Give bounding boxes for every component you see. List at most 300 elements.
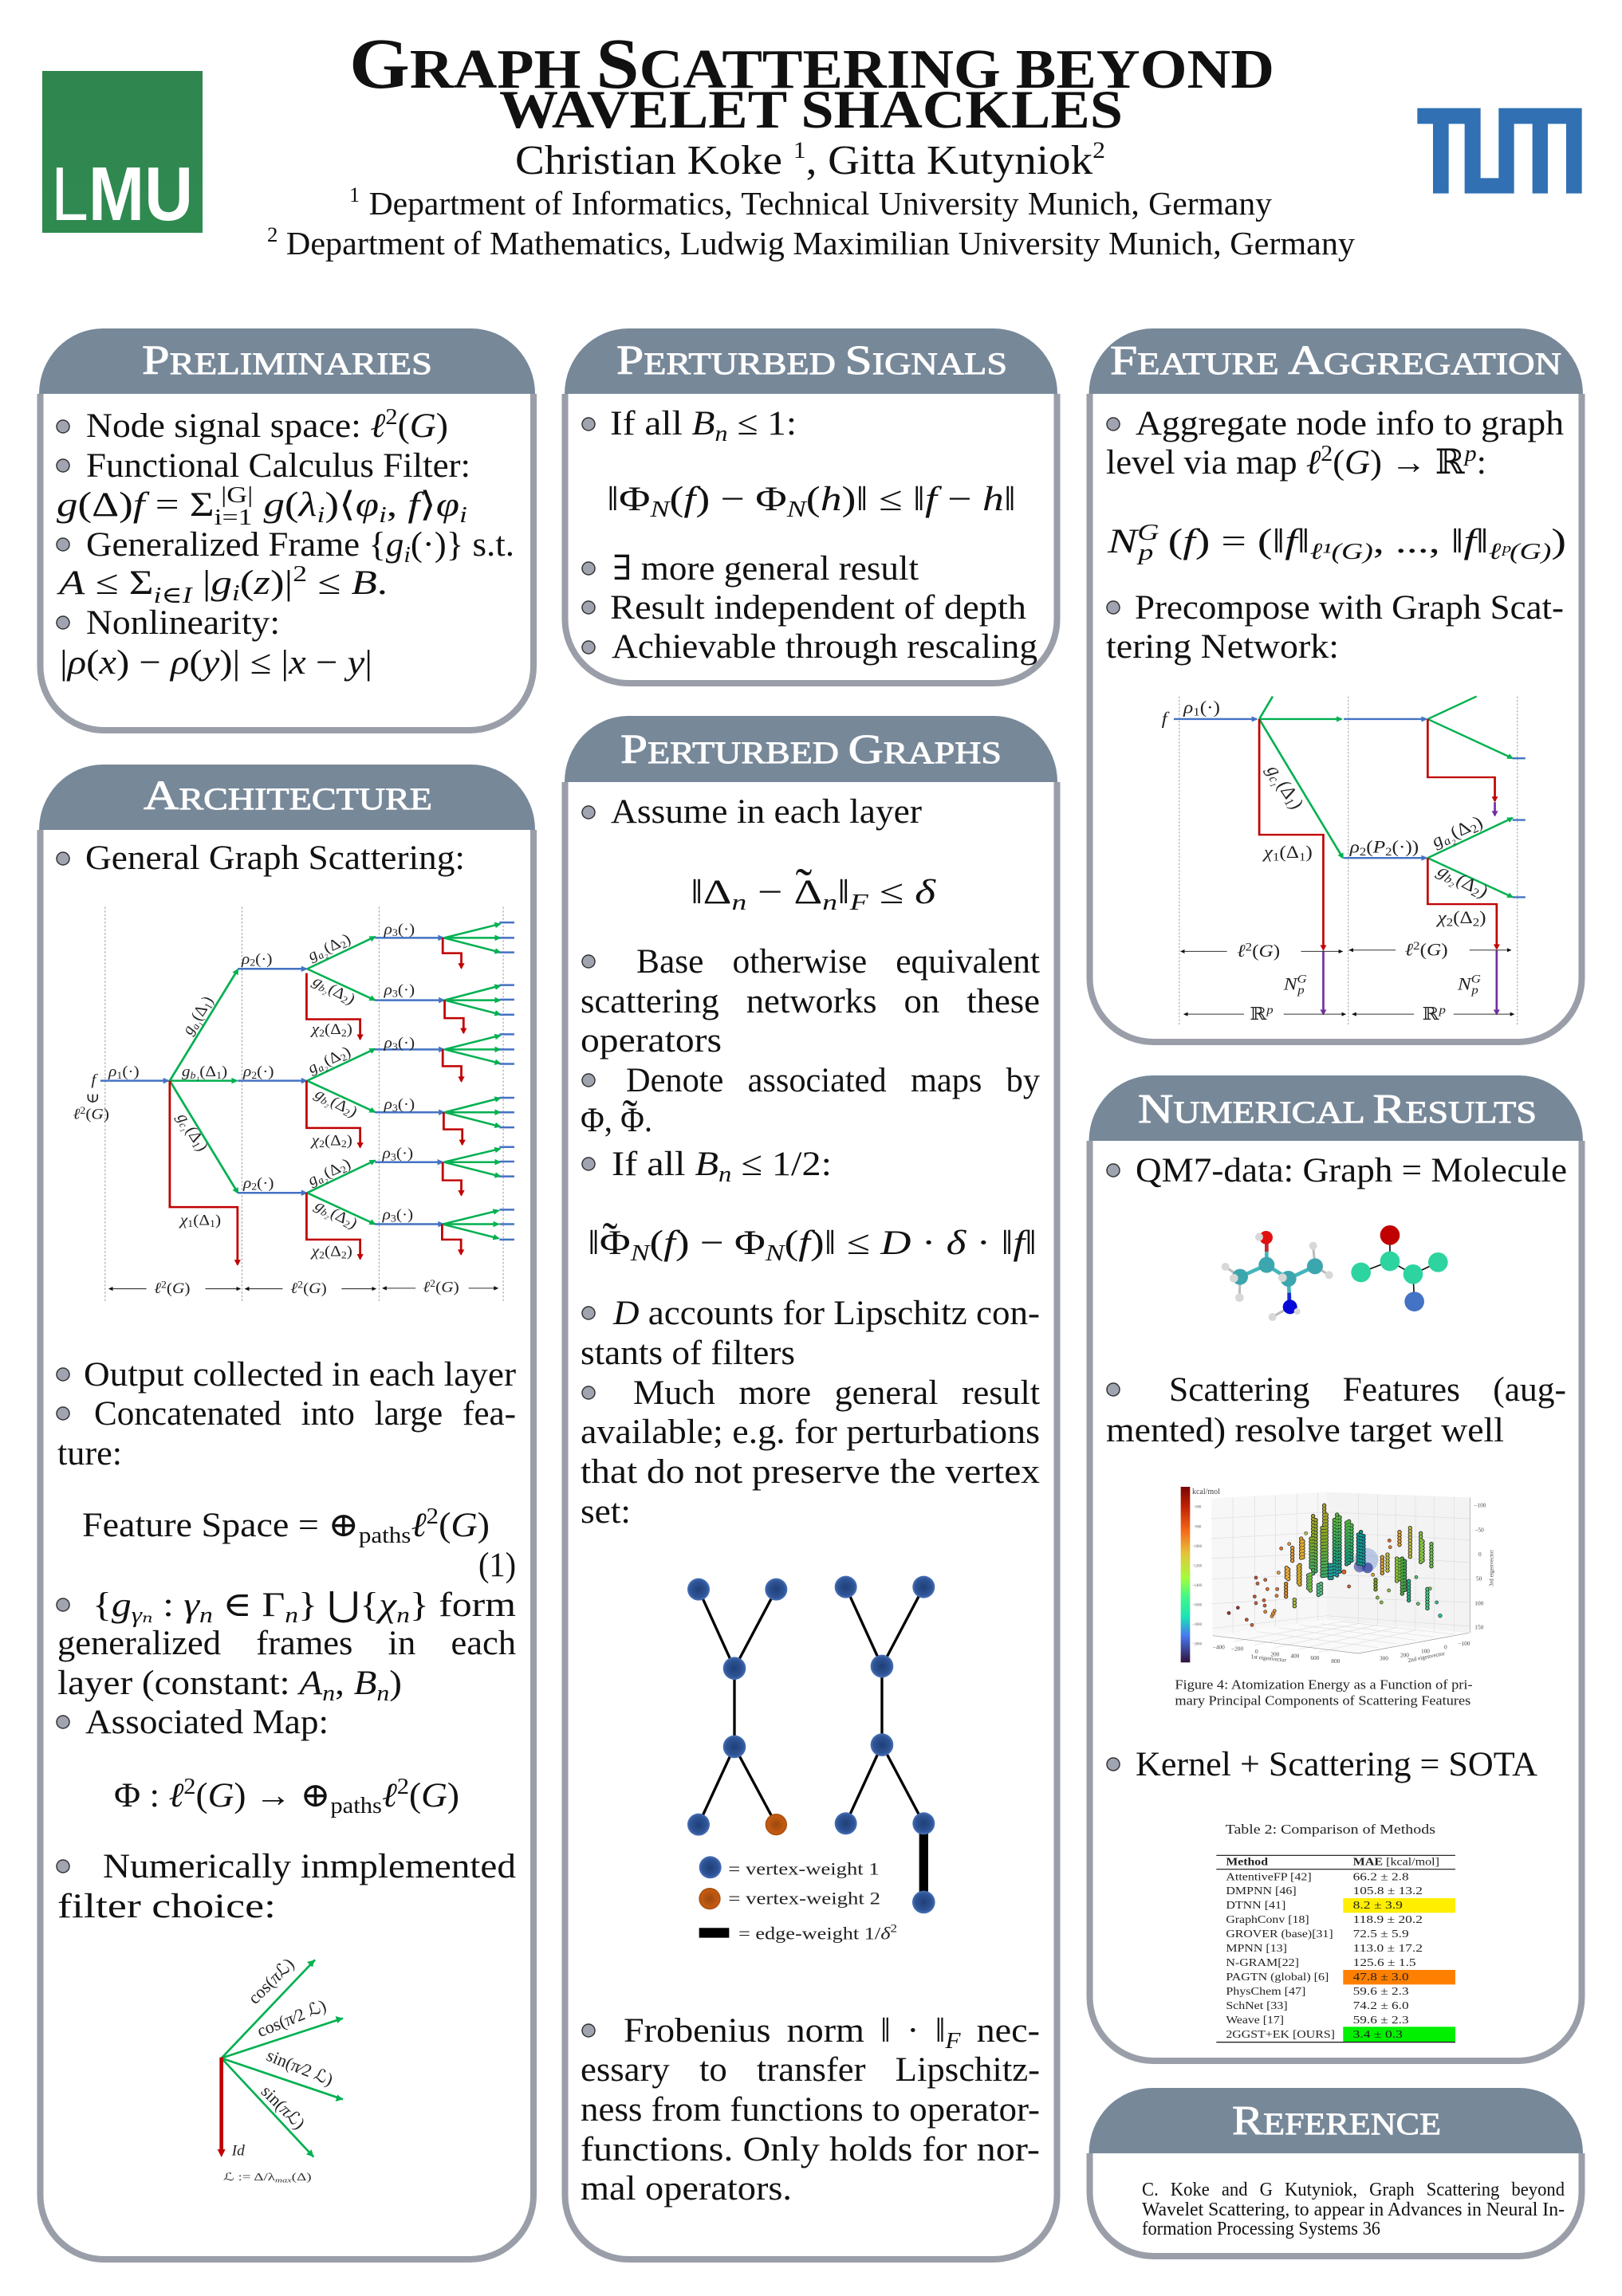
chart: two-layer aggregation network: ( [1366,838,1373,857]
bullet: precompose: tering Network: [1106,628,1339,666]
bullet: much more general: Much more general result [633,1374,1040,1412]
chart: scattering tree diagram: ρ [242,1063,251,1080]
bullet: result independent of depth: Result independent of depth [610,589,1026,627]
chart: filter choice fan: ℒ := Δ/λ [223,2171,259,2183]
chart: scattering tree diagram: ) [347,1132,352,1149]
data points [1227,1505,1442,1626]
chart: scattering tree diagram: χ [179,1212,188,1229]
formula: graph stability: f)‖ ≤ D · δ · ‖ f‖ [798,1225,1034,1262]
formula: operator perturbation: − Δ [746,874,822,911]
formula: graph stability: N [765,1240,786,1266]
chart: scattering tree diagram: 3 [392,1041,398,1052]
formula: graph stability: f) − Φ [663,1225,748,1262]
chart: scattering tree diagram: (Δ [321,1160,344,1181]
bullet: aggregate node info: G) → ℝ [1344,444,1462,482]
chart: two-layer aggregation network: p [1297,985,1305,997]
bullet: generalized frames: n [322,1681,335,1706]
chart: scattering tree diagram: (·) [122,1063,140,1080]
formula: graph stability: ( [650,1225,663,1262]
chart: scattering tree diagram: (Δ [327,1205,351,1227]
bullet: aggregate node info: ( [1333,444,1344,482]
chart: scattering tree diagram: ρ [384,981,392,998]
chart: scattering tree diagram: (·) [257,1063,274,1080]
3d axes: 0 [1444,1644,1447,1651]
chart: scattering tree diagram: g [312,1086,329,1103]
bullet: assume in each layer: Assume in each layer [611,793,922,831]
bullet: generalized frame: (·)} s.t. [411,526,514,564]
formula: operator perturbation: ≤ [868,874,915,911]
bullet: concatenated [57,1395,516,1472]
panel: reference [1089,2088,1583,2256]
chart: two-layer aggregation network: (·) [1200,698,1220,718]
chart: filter choice fan: cos(πℒ) [244,1954,298,2008]
table: comparison of methods: MPNN [13] [1226,1942,1287,1954]
bullet: node signal space: ( [398,407,410,445]
bullet: generalized frames: : [153,1586,183,1624]
bullet: scattering features: mented) resolve target well [1106,1412,1504,1449]
chart: two-layer aggregation network: 2 [1385,846,1392,859]
chart: two-layer aggregation network: 1 [1281,796,1297,808]
chart: graph perturbation example [687,1576,935,1943]
table: comparison of methods: MAE [kcal/mol] [1353,1855,1439,1867]
chart: scattering tree diagram: a₁ [188,1018,204,1032]
chart: scattering tree diagram: ρ [382,1146,391,1162]
chart: scattering tree diagram: (Δ [325,1132,341,1149]
bullet: node signal space: G) [410,407,447,445]
chart: two-layer aggregation network: ) [1479,909,1486,928]
chart: two-layer aggregation network: ℝ [1250,1005,1266,1024]
chart: scattering tree diagram: (Δ [325,981,348,1003]
bullet: frobenius norm: F [944,2028,961,2054]
chart: scattering tree diagram: b₂ [319,1206,333,1221]
formula: associated map: ℓ [382,1777,397,1814]
panel: perturbed graphs [565,716,1057,2259]
chart: filter choice fan: sin(π⁄2 ℒ) [264,2045,336,2090]
bullet: generalized frames: ) [389,1665,402,1702]
bullet: if all Bn: If all B [610,405,713,442]
formula: feature space: ( [439,1507,451,1544]
bullet: aggregate node info: Aggregate node info to graph [1136,405,1564,442]
chart: scattering tree diagram: ρ [384,921,392,938]
chart: scattering tree diagram: ρ [241,951,250,968]
chart: scattering tree diagram: b₂ [319,1095,333,1109]
chart: two-layer aggregation network: 2 [1447,916,1453,929]
3d axes: 3rd eigenvector [1488,1550,1495,1586]
formula: norm aggregation: p [1136,540,1153,565]
formula: signal stability: h)‖ ≤ ‖ f − h‖ [821,481,1014,518]
formula: graph stability [588,1214,1037,1266]
bullet: functional calculus filter [57,447,470,530]
chart: scattering tree diagram: G) [441,1279,459,1295]
bullet: nonlinearity: Nonlinearity: [86,604,280,642]
bullet: functional calculus filter: φ [356,486,379,524]
chart: two-layer aggregation network: (Δ [1279,843,1299,863]
chart: scattering tree diagram: 3 [392,1102,398,1114]
bullet: generalized frames: n [285,1602,298,1628]
table: comparison of methods: Method [1226,1855,1269,1867]
chart: two-layer aggregation network: ℓ [1405,941,1413,960]
chart: scattering tree diagram: 2 [161,1279,167,1290]
chart: scattering tree diagram: 2 [341,1107,352,1119]
authors: 1 [793,137,806,163]
bullet: if all Bn: ≤ 1: [727,405,797,442]
chart: scattering tree diagram: 1 [216,1069,222,1081]
3d axes: 0 [1255,1648,1258,1655]
bullet: frobenius norm: nec- [961,2012,1040,2050]
formula: norm aggregation: N [1107,523,1140,560]
chart: scattering tree diagram: g [173,1111,193,1126]
chart: two-layer aggregation network: ( [1252,942,1259,961]
chart: two-layer aggregation network: P [1372,838,1385,857]
chart: scattering tree diagram: (·) [398,1035,415,1052]
chart: two-layer aggregation network: ) [1285,798,1308,812]
legend: vertex and edge weights: = vertex-weight 1 [728,1859,880,1879]
table: comparison of methods: DMPNN [46] [1226,1885,1297,1897]
chart: scattering tree diagram: 2 [338,1163,349,1176]
bullet: generalized frame: i [404,542,411,568]
legend: vertex and edge weights: = edge-weight 1/ δ [738,1923,889,1943]
chart: scattering tree diagram: ) [347,1021,352,1038]
color bar: −2000 [1192,1643,1203,1647]
bullet: functional calculus filter: g(Δ) f = Σ [57,486,201,524]
bullet: output collected: Output collected in each layer [84,1356,516,1394]
3d axes: 150 [1474,1623,1484,1630]
text block: citation: C. Koke and G Kutyniok, Graph Scattering beyond [1142,2180,1565,2200]
bullet: generalized frames: n [376,1681,389,1706]
chart: two-layer aggregation network: p [1266,1004,1274,1016]
chart: two-layer aggregation network: p [1470,985,1478,997]
chart: two-layer aggregation network: G [1471,973,1481,985]
chart: scattering tree diagram: ( [167,1280,172,1297]
chart: two-layer aggregation network: g [1427,830,1447,851]
table: comparison of methods: 74.2 ± 6.0 [1353,1999,1409,2011]
chart: scattering tree diagram: b₂ [317,982,331,996]
bullet: kernel + scattering: Kernel + Scattering = SOTA [1136,1746,1537,1783]
bullet: generalized frames: } ⋃{ [298,1586,379,1624]
chart: scattering tree diagram: (·) [255,951,272,968]
logo: LMU [42,71,203,237]
3d axes: 800 [1331,1657,1341,1665]
bullet: denote maps [581,1062,1040,1141]
chart: two-layer aggregation network: 2 [1246,942,1252,953]
color bar: −1800 [1192,1623,1203,1627]
bullet: generalized frame: B. [351,564,386,602]
chart: two-layer aggregation network: a₂ [1441,832,1458,848]
bullet: denote maps: ˜ [623,1091,638,1141]
chart: scattering tree diagram: 3 [392,988,398,999]
chart: scattering tree diagram: ) [341,930,354,948]
chart: two-layer aggregation network: g [1262,762,1286,780]
chart: scattering tree diagram: ) [199,993,217,1006]
table: comparison of methods: 59.6 ± 2.3 [1353,2014,1409,2026]
formula: associated map: Φ : ℓ [114,1777,183,1814]
3d axes: 200 [1270,1650,1280,1657]
3d axes: 50 [1476,1575,1482,1582]
chart: scattering tree diagram: ) [341,1155,354,1173]
bullet: generalized frames: } form [410,1586,516,1624]
chart: scattering tree diagram: 2 [80,1105,85,1116]
chart: scattering tree diagram: (Δ [327,1094,351,1115]
heading: numerical results: NUMERICAL RESULTS [1138,1087,1537,1132]
chart: scattering tree diagram: a₂ [315,1060,329,1074]
chart: scattering tree diagram: (·) [396,1146,413,1162]
formula: feature space: G) [451,1507,489,1544]
chart: scattering tree diagram: ∈ [84,1093,102,1104]
bullet: much more general: that do not preserve the vertex [581,1453,1040,1491]
chart: scattering tree diagram: ( [303,1280,309,1297]
table: comparison of methods: 3.4 ± 0.3 [1353,2028,1403,2040]
formula: feature space: 2 [427,1504,439,1529]
chart: scattering tree diagram: 2 [341,1249,347,1260]
chart: two-layer aggregation network: b₂ [1442,872,1459,889]
legend: vertex and edge weights [699,1856,897,1943]
legend: vertex and edge weights: = vertex-weight 2 [728,1888,880,1908]
bullet: functional calculus filter: i [317,502,325,528]
bullet: D accounts: D accounts for Lipschitz con- [612,1295,1040,1332]
bullet: generalized frames: n [199,1602,213,1628]
bullet: QM7 data: QM7-data: Graph = Molecule [1136,1152,1567,1189]
formula: associated map: ( [196,1777,208,1814]
formula: feature space: (1) [478,1547,516,1584]
3d axes: −50 [1474,1527,1484,1534]
bullet: base networks: scattering networks on these [581,983,1040,1020]
table: comparison of methods: N-GRAM[22] [1226,1956,1299,1968]
bullet: generalized frames: layer (constant: A [57,1665,321,1702]
table: comparison of methods: 105.8 ± 13.2 [1353,1885,1423,1897]
chart: scattering tree diagram: a₂ [315,1172,329,1186]
formula: norm aggregation: ( [1168,523,1183,560]
panel: preliminaries [39,328,535,730]
chart: scattering tree diagram: f [91,1071,98,1088]
chart: scattering tree diagram: 2 [319,1249,325,1260]
panel: perturbed signals [565,328,1057,683]
chart: scattering tree diagram: 1 [202,1001,215,1011]
bullet: generalized frames: generalized frames in each [57,1625,516,1662]
chart: scattering tree diagram: ) [344,991,358,1008]
bullet: concatenated: ture: [57,1435,122,1472]
chart: two-layer aggregation network: ) [1470,812,1486,832]
bullet: much more general: available; e.g. for perturbations [581,1413,1040,1451]
chart: scattering tree diagram: ℓ [73,1106,81,1122]
bullet: aggregate node info: p [1463,441,1477,466]
authors: , Gitta Kutyniok [806,138,1092,183]
formula: norm aggregation: ℓ¹(G) [1309,539,1373,564]
color bar: −1200 [1192,1565,1203,1569]
chart: filter choice fan [218,1954,343,2184]
formula: associated map: G) [421,1777,459,1814]
chart: two-layer aggregation network: ℝ [1422,1005,1439,1024]
bullet: base networks [581,943,1040,1060]
formula: norm aggregation: G [1137,520,1159,545]
chart: scattering tree diagram: ( [435,1279,441,1295]
3d axes: 2nd eigenvector [1407,1649,1446,1664]
chart: two-layer aggregation network: (Δ [1272,778,1301,802]
chart: two-layer aggregation network: p [1438,1004,1446,1016]
bullet: scattering features: Scattering Features (aug- [1169,1371,1566,1409]
heading: perturbed signals [565,328,1057,394]
chart: scattering tree diagram: 1 [189,1140,203,1150]
formula: operator perturbation: ‖Δ [691,874,722,911]
formula: graph stability: ‖Φ [588,1225,623,1262]
chart: scattering tree diagram: (Δ [187,1002,211,1024]
table: comparison of methods: SchNet [33] [1226,1999,1288,2011]
bullet: generalized frame: i [232,580,240,606]
bullet: scattering features [1106,1371,1566,1449]
heading: feature aggregation: FEATURE AGGREGATION [1110,338,1561,383]
chart: scattering tree diagram: (·) [398,1096,415,1113]
color bar: −1400 [1192,1584,1203,1588]
figure: atomization energy scatter plot [1175,1487,1495,1708]
panel: feature aggregation [1089,328,1583,1042]
bullet: nonlinearity: |ρ(x) − ρ(y)| ≤ |x − y| [60,644,372,682]
bullet: concatenated: Concatenated into large fea- [94,1395,516,1433]
chart: filter choice fan: Id [231,2142,245,2159]
heading: preliminaries: PRELIMINARIES [142,338,432,383]
table: comparison of methods: 125.6 ± 1.5 [1353,1956,1416,1968]
bullet: much more general [581,1374,1040,1531]
table: comparison of methods: DTNN [41] [1226,1899,1285,1911]
color bar [1181,1487,1220,1662]
bullet: general graph scattering: General Graph Scattering: [85,839,465,877]
chart: two-layer aggregation network: ℓ [1237,942,1246,961]
formula: operator perturbation: n [731,890,746,915]
chart: two-layer aggregation network: ρ [1349,838,1360,857]
graph: right tree with heavy edge [835,1576,935,1913]
caption: figure 4: Figure 4: Atomization Energy as a Function of pri- [1175,1677,1473,1692]
chart: scattering tree diagram: ℓ [423,1279,431,1295]
bullet: functional calculus filter: , [387,486,407,524]
bullet: functional calculus filter: g(λ [263,486,313,524]
table: comparison of methods: Table 2: Comparison of Methods [1226,1822,1435,1837]
authors: Christian Koke [515,138,767,183]
chart: two-layer aggregation network: χ [1262,843,1274,863]
chart: two-layer aggregation network: 2 [1469,886,1482,900]
table: comparison of methods: PhysChem [47] [1226,1985,1305,1997]
heading: perturbed graphs: PERTURBED GRAPHS [620,727,1002,773]
chart: two-layer aggregation network: N [1283,975,1298,994]
chart: filter choice fan: max [275,2176,292,2184]
bullet: frobenius norm [581,2012,1040,2208]
chart: scattering tree diagram: 2 [250,957,255,969]
bullet: precompose [1106,589,1564,666]
chart: two-layer aggregation network: G) [1259,942,1280,961]
bullet: generalized frames: B [354,1665,376,1702]
bullet: achievable through rescaling: Achievable through rescaling [612,628,1037,666]
table: comparison of methods: 47.8 ± 3.0 [1353,1971,1409,1983]
bullet: aggregate node info: 2 [1321,441,1333,466]
chart: two-layer aggregation network: (·)) [1392,838,1419,857]
chart: scattering tree diagram [73,906,514,1301]
bullet: generalized frame: Generalized Frame { g [86,526,403,564]
3d axes: −100 [1474,1502,1486,1509]
chart: two-layer aggregation network: 2 [1473,916,1479,929]
panel: architecture [39,765,535,2259]
chart: scattering tree diagram: G) [309,1280,327,1297]
chart: scattering tree diagram: ) [215,1212,221,1229]
bullet: generalized frame: g [211,564,232,602]
chart: scattering tree diagram: (Δ [325,1021,341,1038]
3d axes: 1st eigenvector [1250,1653,1287,1664]
chart: two-layer aggregation network: (Δ [1453,909,1473,928]
chart: scattering tree diagram: 2 [319,1028,325,1039]
title: GRAPH SCATTERING BEYOND [349,25,1274,104]
chart: scattering tree diagram: χ [310,1021,320,1038]
bullet: generalized frame: 2 [293,561,307,587]
chart: scattering tree diagram: 1 [187,1218,193,1229]
table: comparison of methods: GraphConv [18] [1226,1913,1309,1925]
chart: scattering tree diagram: χ [310,1243,320,1260]
bullet: D accounts: stants of filters [581,1335,795,1372]
chart: scattering tree diagram: 2 [251,1181,257,1193]
3d axes: 100 [1474,1599,1484,1606]
formula: feature space [82,1504,516,1584]
bullet: frobenius norm: Frobenius norm ‖ · ‖ [624,2012,923,2050]
bullet: functional calculus filter: i [379,502,387,528]
chart: scattering tree diagram: ℓ [290,1280,298,1297]
chart: scattering tree diagram: 2 [430,1278,435,1289]
bullet: generalized frames: γₙ [132,1602,153,1628]
bullet: generalized frames: , [335,1665,354,1702]
affiliation 1: 1 [349,183,360,206]
chart: scattering tree diagram: χ [310,1132,320,1149]
chart: scattering tree diagram: G) [172,1280,191,1297]
table: comparison of methods: AttentiveFP [42] [1226,1870,1312,1882]
formula: operator perturbation: δ [915,874,936,911]
bullet: much more general: set: [581,1493,631,1531]
chart: filter choice fan: sin(πℒ) [258,2081,309,2133]
chart: scattering tree diagram: ρ [384,1035,392,1052]
chart: two-layer aggregation network: G) [1427,941,1448,960]
chart: two-layer aggregation network: ( [1420,941,1427,960]
chart: scattering tree diagram: 2 [341,1138,347,1150]
logo: LMU: LMU [51,151,193,237]
bullet: precompose: Precompose with Graph Scat- [1135,589,1564,627]
bullet: frobenius norm: essary to transfer Lipschitz- [581,2051,1040,2089]
table: comparison of methods: 118.9 ± 20.2 [1353,1913,1423,1925]
chart: two-layer aggregation network: 1 [1299,851,1305,863]
bullet: node signal space: 2 [385,404,398,430]
bullet: generalized frame: z)| [254,564,289,602]
formula: operator perturbation: F [848,890,868,915]
bullet: generalized frames: γ [183,1586,200,1624]
caption: figure 4: mary Principal Components of Scattering Features [1175,1693,1471,1708]
formula: associated map: 2 [397,1774,409,1799]
chart: scattering tree diagram: 2 [338,938,349,951]
formula: norm aggregation: , ..., ‖ [1373,523,1463,560]
chart: scattering tree diagram: 3 [391,1213,396,1224]
table: comparison of methods: 72.5 ± 5.9 [1353,1928,1409,1940]
chart: scattering tree diagram: a₂ [315,947,329,961]
formula: signal stability: ( [806,481,821,518]
chart: scattering tree diagram: g [179,1023,199,1037]
logo: TUM [1404,95,1582,194]
formula: operator perturbation: ˜ [796,859,813,914]
chart: scattering tree diagram: g [182,1063,191,1080]
heading: reference: REFERENCE [1232,2098,1441,2144]
formula: feature space: paths [359,1523,411,1548]
bullet: base networks: Base otherwise equivalent [636,943,1040,981]
chart: scattering tree diagram: (·) [398,981,415,998]
chart: scattering tree diagram: g [305,1059,321,1077]
chart: scattering tree diagram: 1 [116,1069,122,1081]
formula: operator perturbation [691,859,936,915]
bullet: generalized frame [56,526,514,608]
bullet: functional calculus filter: f⟩φ [407,486,455,524]
3d axes: 100 [1421,1647,1430,1654]
formula: norm aggregation: ) [1551,523,1566,560]
bullet: numerically implemented: filter choice: [57,1888,276,1925]
text block: citation [1142,2180,1565,2239]
